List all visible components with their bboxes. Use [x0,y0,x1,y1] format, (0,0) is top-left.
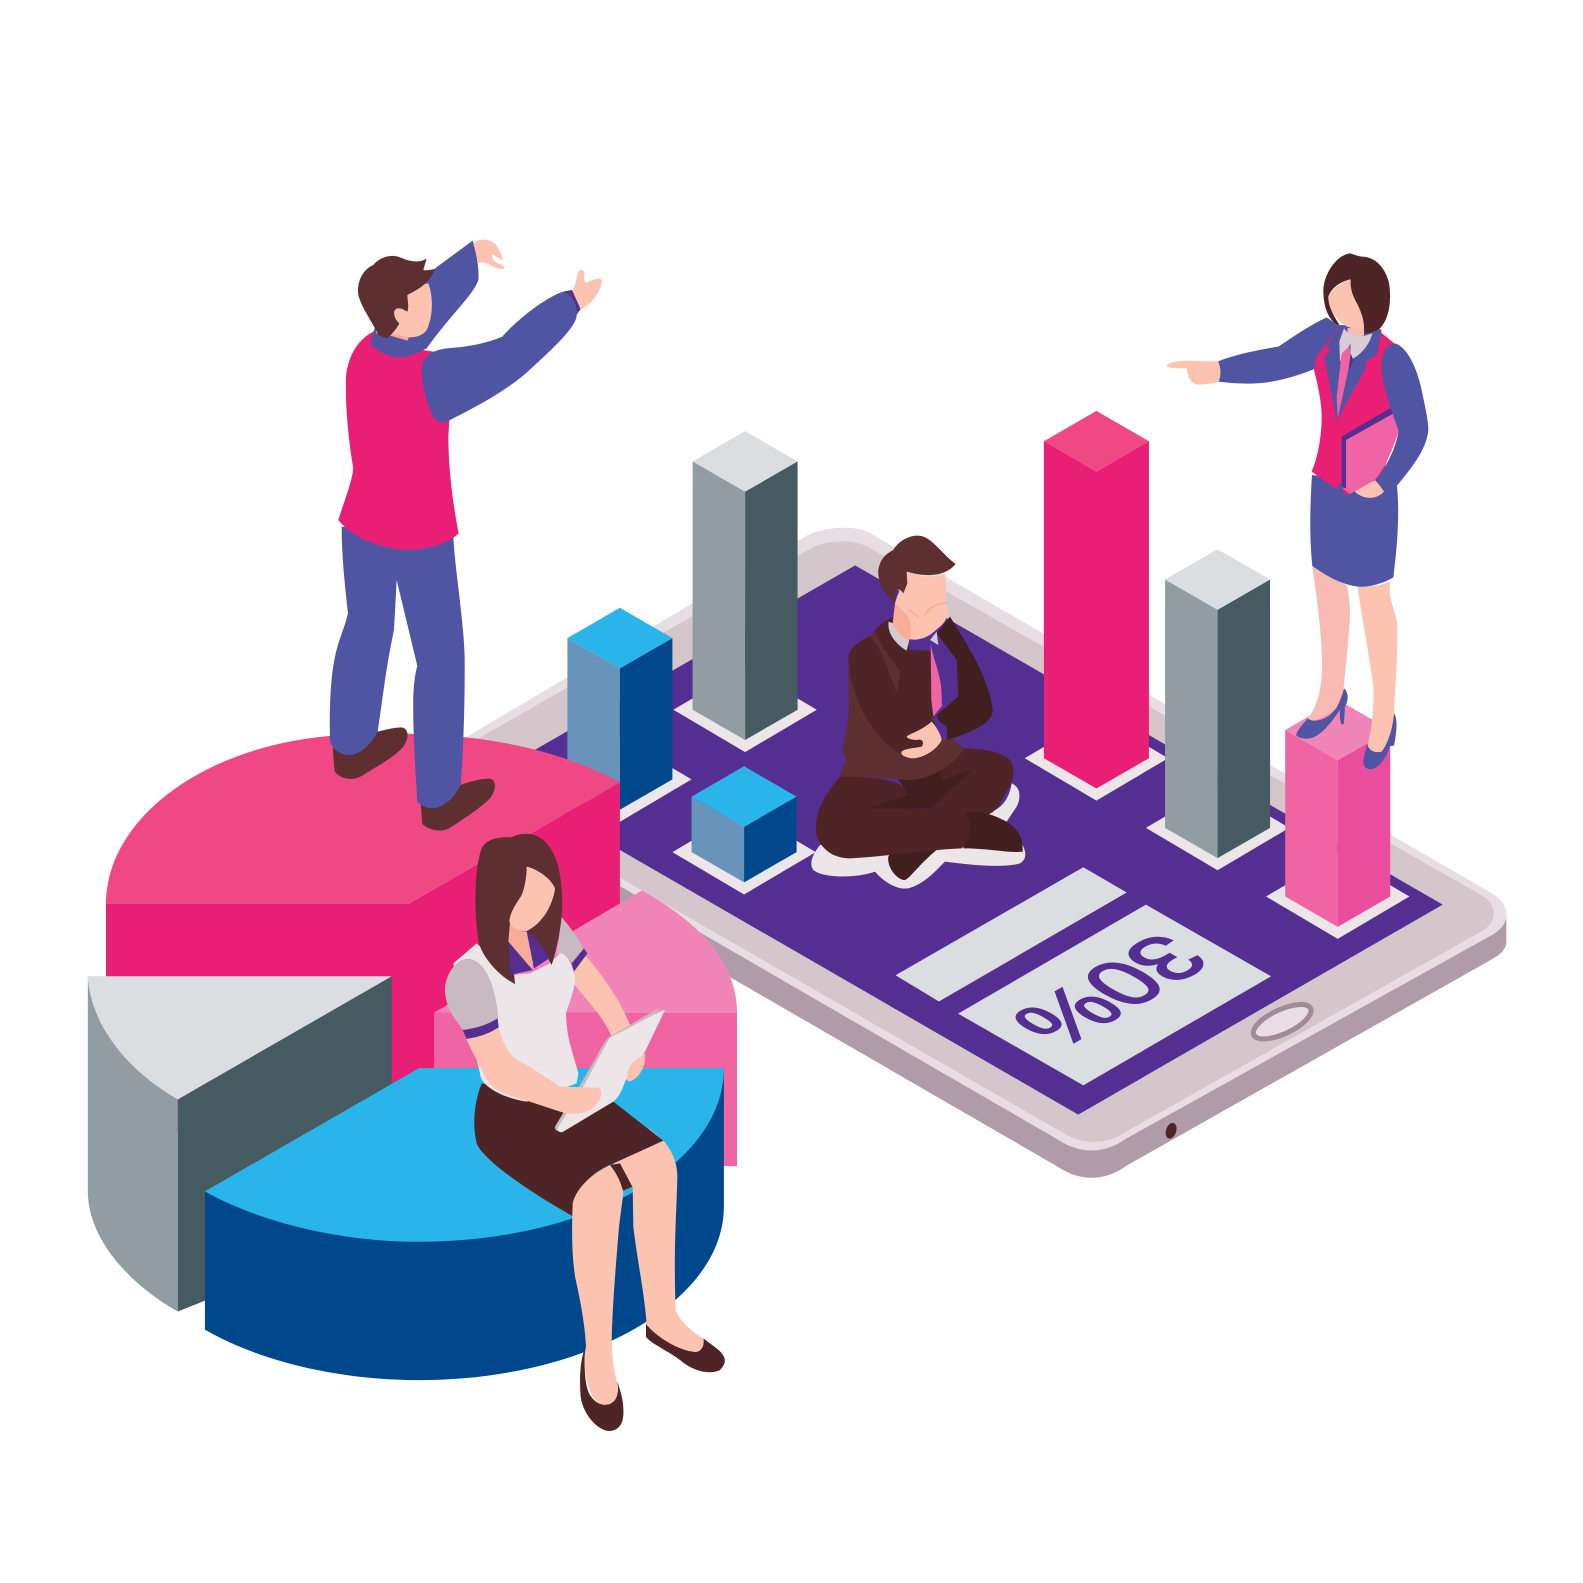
tablet screen [491,565,1443,1115]
face [895,572,948,640]
tablet body [429,528,1507,1178]
woman legs and skirt [474,1083,725,1431]
pointing hand [1167,361,1220,385]
trousers [330,527,465,808]
jacket sleeve [848,617,937,753]
near arm and hand [466,1027,601,1114]
outstretched hand [572,270,602,309]
cuff [909,639,931,651]
front heel [1363,713,1396,769]
jacket [839,660,963,780]
man torso [338,240,602,550]
tie [1337,346,1351,418]
hair [358,256,435,338]
collar [888,622,938,651]
far cuff [572,948,587,972]
raised arm [937,617,993,740]
man legs [330,527,495,830]
screen panel 30 percent [958,905,1271,1085]
tablet shadow [555,1007,660,1132]
vest [1312,325,1398,495]
skirt [1310,475,1398,587]
holding arm [1375,343,1428,491]
tablet device [558,1010,665,1132]
hair [1323,253,1390,334]
bar: blue cube [672,766,816,895]
trousers back [923,748,1014,815]
neck [1347,325,1365,343]
bar: pink block [1266,700,1409,939]
trouser shade [865,768,974,809]
near cuff [463,1018,499,1039]
front arm [422,291,581,422]
pointing arm [1217,317,1340,384]
blouse [453,943,578,1102]
neck [508,923,533,970]
woman upper body [1167,253,1428,498]
near leg [572,1165,623,1405]
folder spine [1342,407,1393,488]
tie shade [932,643,945,705]
shoes [888,812,1023,880]
tie [931,644,943,717]
back arm [410,241,479,353]
lower cuff [932,717,947,740]
pie slice: red [106,734,620,1131]
screen panel blank [896,867,1127,1002]
bar: red tall [1025,411,1168,801]
skirt [474,1083,663,1217]
far leg [613,1141,704,1352]
fingers behind tablet [627,1053,645,1082]
shirt collar [1339,328,1372,362]
face [388,283,432,337]
pie slice: grey [88,976,392,1311]
screen panel 30 percent: 30% [991,921,1231,1060]
face [509,867,555,931]
far shoe [646,1323,725,1372]
blazer lapels [1324,325,1382,420]
neck shade [893,603,911,641]
pie slice: pink [434,890,737,1166]
hair [475,834,562,984]
left hair lock [490,920,515,984]
front leg [1357,582,1397,752]
far sleeve [557,917,583,963]
near shoe [580,1347,623,1431]
tie shade [1348,353,1353,372]
seated man [811,536,1025,889]
seat shadow [811,783,1025,889]
microphone hole [1164,1122,1178,1140]
trousers front [816,777,970,858]
standing woman [1167,253,1428,769]
pie charts [88,734,737,1380]
seated woman [445,834,725,1431]
back heel [1296,688,1348,739]
hair [878,536,956,603]
bar: grey right [1146,549,1289,870]
scene: tablet with bars [429,411,1507,1178]
blouse collar [508,932,549,975]
collar [370,327,427,357]
back leg [1308,566,1350,722]
bar: grey tall [673,431,817,752]
neck [377,327,410,341]
hand holding folder [1355,480,1384,498]
upper hand [473,240,504,269]
woman lower body [1296,475,1398,769]
near sleeve [445,959,498,1030]
knee [647,1127,663,1141]
folder cover [1342,413,1399,494]
pie slice: blue [205,1068,724,1380]
hand [901,722,942,758]
face creases [908,603,947,617]
face [1328,279,1364,329]
shoes [333,727,495,830]
standing man [330,240,602,830]
cuff [563,290,580,312]
vest [338,332,459,550]
woman torso [445,834,665,1132]
bar: blue tall [548,608,692,822]
lapel [870,632,901,693]
home button [1249,998,1316,1046]
far arm [573,957,630,1037]
